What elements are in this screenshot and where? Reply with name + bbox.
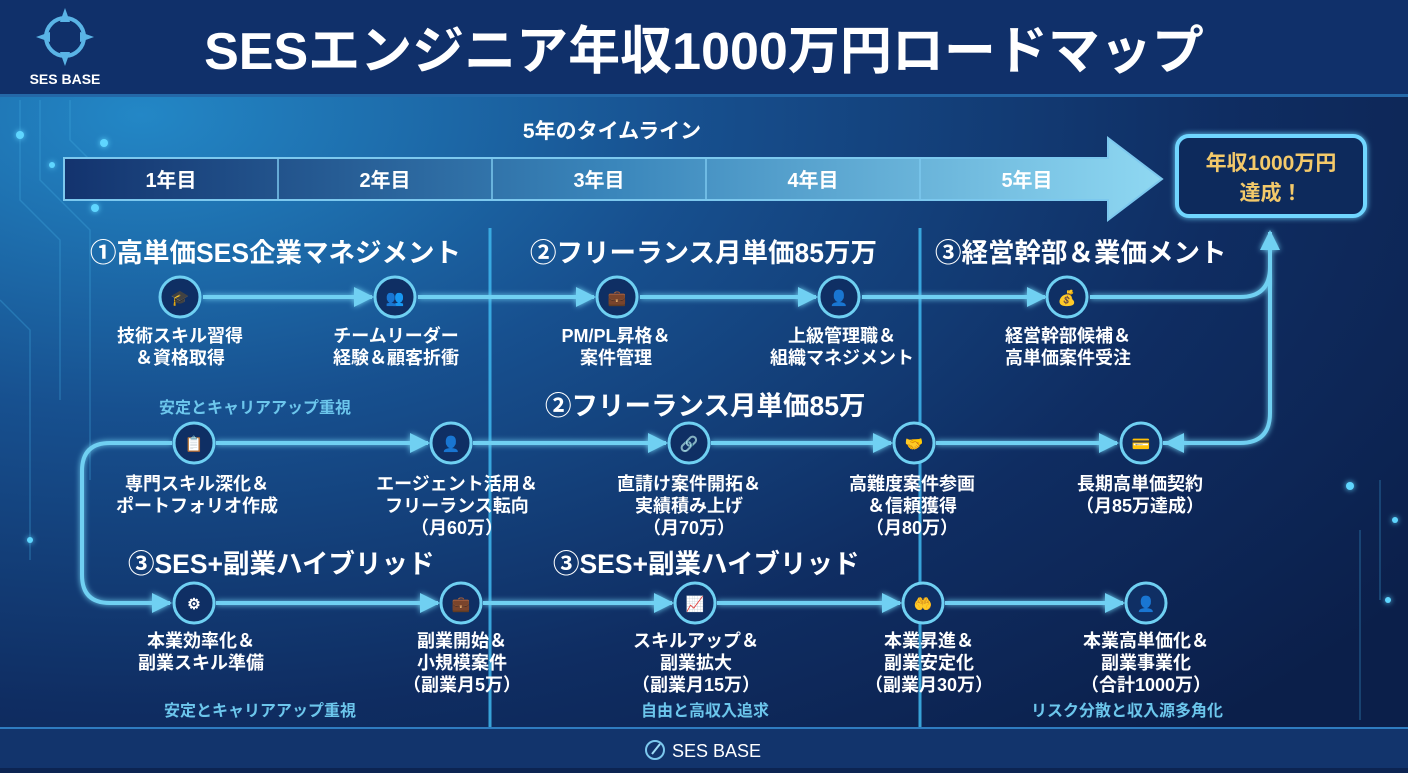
- step labels: 上級管理職＆: [788, 325, 896, 346]
- step labels: 経験＆顧客折衝: [333, 348, 459, 368]
- step labels: 直請け案件開拓＆: [617, 473, 761, 494]
- captions: 自由と高収入追求: [641, 701, 769, 720]
- icons: [160, 277, 1166, 623]
- step labels: ポートフォリオ作成: [116, 495, 278, 516]
- step labels: チームリーダー: [333, 325, 459, 346]
- captions: [159, 398, 1223, 720]
- goal box: 達成！: [1240, 181, 1302, 205]
- header: [0, 0, 1408, 97]
- text: 👤: [830, 289, 848, 307]
- step labels: 高難度案件参画: [849, 474, 975, 494]
- goal box: 年収1000万円: [1206, 152, 1336, 175]
- step labels: 副業開始＆: [417, 631, 507, 651]
- text: 📋: [185, 435, 203, 453]
- goal box: [1177, 136, 1365, 216]
- section headings: ③SES+副業ハイブリッド: [128, 549, 434, 579]
- step labels: 高単価案件受注: [1005, 347, 1131, 368]
- step labels: ＆信頼獲得: [867, 496, 957, 516]
- step labels: 実績積み上げ: [635, 496, 743, 516]
- text: 👥: [386, 290, 404, 307]
- section headings: [90, 238, 1226, 579]
- text: 🤝: [905, 436, 923, 453]
- title: SESエンジニア年収1000万円ロードマップ: [204, 23, 1204, 81]
- circuit decoration: [0, 100, 1380, 720]
- step labels: エージェント活用＆: [376, 474, 538, 494]
- timeline bar: 2年目: [359, 169, 411, 192]
- section headings: ③SES+副業ハイブリッド: [553, 549, 859, 579]
- step labels: （副業月15万）: [632, 675, 760, 695]
- step labels: （月85万達成）: [1076, 495, 1204, 516]
- section headings: ③経営幹部＆業価メント: [935, 238, 1226, 268]
- step labels: （月80万）: [866, 518, 958, 538]
- timeline heading: 5年のタイムライン: [523, 120, 701, 143]
- captions: リスク分散と収入源多角化: [1031, 701, 1223, 720]
- step labels: 本業昇進＆: [884, 631, 974, 651]
- step labels: スキルアップ＆: [633, 631, 759, 651]
- section headings: ①高単価SES企業マネジメント: [90, 238, 461, 268]
- step labels: 組織マネジメント: [770, 348, 914, 368]
- text: ⚙: [187, 596, 201, 613]
- step labels: 小規模案件: [417, 653, 507, 673]
- step labels: 副業安定化: [884, 653, 974, 673]
- step labels: 経営幹部候補＆: [1005, 326, 1131, 346]
- logo: [30, 8, 100, 87]
- step labels: [116, 325, 1211, 695]
- timeline bar: 5年目: [1001, 169, 1053, 192]
- step labels: 本業効率化＆: [147, 631, 255, 651]
- step labels: PM/PL昇格＆: [561, 326, 671, 346]
- text: 💼: [452, 596, 471, 613]
- text: 🎓: [171, 290, 189, 307]
- step labels: （副業月30万）: [865, 675, 993, 695]
- text: 👤: [1137, 595, 1155, 613]
- section headings: ②フリーランス月単価85万万: [530, 238, 877, 268]
- timeline bar: 3年目: [573, 169, 625, 192]
- text: 💼: [608, 290, 627, 307]
- step labels: 副業スキル準備: [138, 652, 264, 673]
- footer: [0, 727, 1408, 768]
- timeline bar: 4年目: [787, 169, 839, 192]
- step labels: 技術スキル習得: [117, 325, 243, 346]
- text: 💳: [1132, 436, 1150, 453]
- text: 👤: [442, 435, 460, 453]
- text: 💰: [1058, 289, 1076, 307]
- flow arrows: [82, 232, 1270, 603]
- step labels: 専門スキル深化＆: [125, 474, 269, 494]
- text: 🤲: [914, 596, 932, 613]
- step labels: 副業事業化: [1101, 653, 1191, 673]
- step labels: 案件管理: [580, 347, 652, 368]
- step labels: 本業高単価化＆: [1083, 630, 1209, 651]
- timeline bar: [64, 138, 1162, 220]
- footer: SES BASE: [672, 741, 761, 761]
- logo: SES BASE: [30, 71, 100, 87]
- section headings: ②フリーランス月単価85万: [545, 391, 865, 421]
- step labels: ＆資格取得: [135, 348, 225, 368]
- text: 🔗: [680, 434, 699, 453]
- step labels: 副業拡大: [660, 653, 732, 673]
- step labels: フリーランス転向: [385, 496, 529, 516]
- step labels: （月70万）: [643, 518, 735, 538]
- step labels: （副業月5万）: [403, 675, 521, 695]
- timeline bar: 1年目: [145, 169, 197, 192]
- step labels: （合計1000万）: [1081, 675, 1211, 695]
- captions: 安定とキャリアアップ重視: [159, 398, 351, 417]
- step labels: （月60万）: [411, 518, 503, 538]
- vertical dividers: [490, 228, 920, 728]
- text: 📈: [686, 595, 704, 613]
- captions: 安定とキャリアアップ重視: [164, 701, 356, 720]
- step labels: 長期高単価契約: [1077, 473, 1203, 494]
